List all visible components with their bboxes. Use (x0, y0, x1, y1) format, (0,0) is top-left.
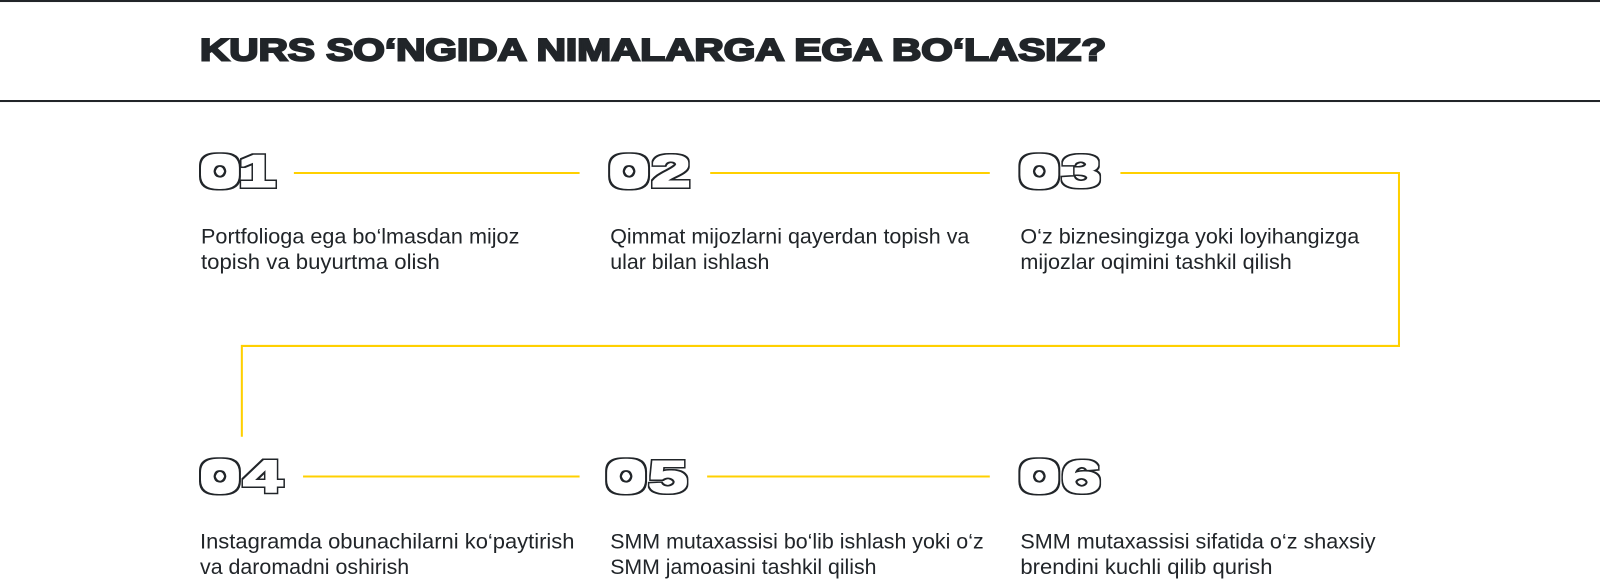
number 01: 1 (238, 147, 276, 197)
number 05: 5 (648, 451, 688, 502)
step 05 (605, 451, 990, 579)
number 06 (1018, 451, 1101, 502)
number 04: 0 (199, 454, 241, 499)
text 04: Instagramda obunachilarni ko‘paytirish (200, 531, 574, 554)
number 01 (199, 147, 276, 197)
step 01 (199, 147, 580, 274)
text 03: O‘z biznesingizga yoki loyihangizga (1020, 225, 1360, 248)
connector: yellow line from step 3 to step 4 (242, 173, 1399, 437)
number 01: 0 (199, 149, 241, 193)
number 06: 0 (1018, 454, 1060, 499)
number 04: 4 (243, 451, 283, 502)
text 06: brendini kuchli qilib qurish (1020, 556, 1272, 579)
number 05: 0 (605, 454, 647, 499)
step 04 (199, 451, 580, 579)
number 03: 3 (1061, 146, 1101, 196)
text 06: SMM mutaxassisi sifatida o‘z shaxsiy (1020, 531, 1376, 554)
text 02: ular bilan ishlash (610, 251, 769, 274)
line 05 (707, 476, 990, 478)
line 02 (710, 172, 990, 174)
number 06: 6 (1061, 451, 1101, 502)
line 01 (294, 172, 580, 174)
number 02: 2 (651, 146, 691, 196)
text 03: mijozlar oqimini tashkil qilish (1020, 251, 1292, 274)
number 02: 0 (608, 149, 650, 193)
text 05: SMM jamoasini tashkil qilish (610, 556, 877, 579)
number 03 (1018, 146, 1101, 196)
line 04 (303, 476, 580, 478)
number 05 (605, 451, 688, 502)
step 06 (1018, 451, 1376, 579)
text 05: SMM mutaxassisi bo‘lib ishlash yoki o‘z (610, 531, 984, 554)
step 03 (1018, 146, 1360, 274)
step 02 (608, 146, 990, 274)
number 04 (199, 451, 283, 502)
number 02 (608, 146, 691, 196)
text 01: Portfolioga ega bo‘lmasdan mijoz (201, 225, 519, 248)
text 04: va daromadni oshirish (200, 556, 409, 579)
number 03: 0 (1018, 149, 1060, 193)
title: KURS SO‘NGIDA NIMALARGA EGA BO‘LASIZ? (200, 32, 1106, 68)
text 02: Qimmat mijozlarni qayerdan topish va (610, 225, 970, 248)
text 01: topish va buyurtma olish (201, 251, 440, 274)
